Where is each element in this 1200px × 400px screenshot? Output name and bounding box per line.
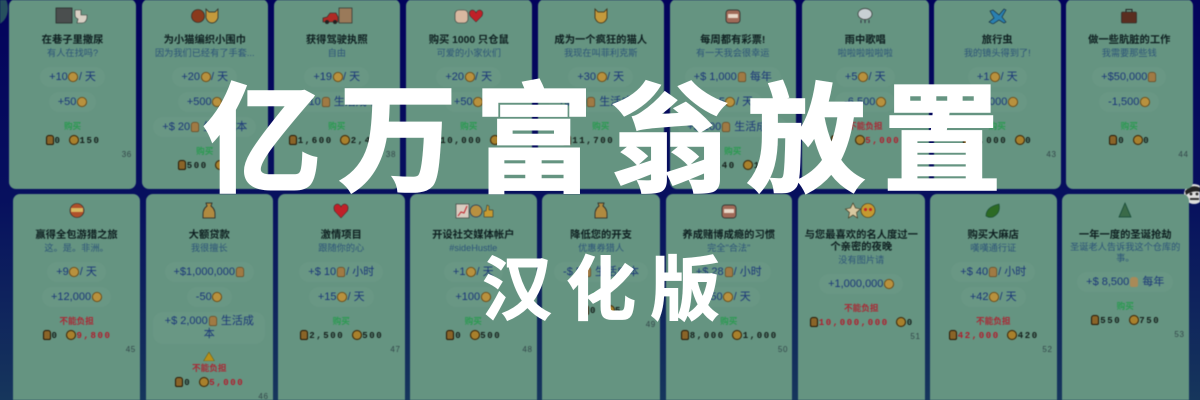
- income pill: +1,000,000: [828, 278, 883, 290]
- bonus pill: [835, 92, 895, 112]
- subtitle: 我很擅长: [191, 243, 228, 253]
- title: 购买 1000 只仓鼠: [429, 35, 509, 46]
- income pill: +30 / 天: [577, 71, 624, 83]
- title: 获得驾驶执照: [306, 35, 368, 46]
- buy label: 购买: [460, 121, 477, 131]
- buy label: 购买: [64, 121, 81, 131]
- income pill: [951, 262, 1035, 282]
- title: 赢得全包游猎之旅: [35, 230, 118, 241]
- income pill: [172, 67, 237, 87]
- cost: [445, 329, 501, 341]
- income pill: [47, 262, 106, 282]
- card 45: [13, 194, 140, 400]
- buy label: 购买: [724, 146, 741, 156]
- card 50: [666, 194, 792, 400]
- card 52: [930, 194, 1056, 400]
- income pill: +$ 10 / 小时: [308, 266, 374, 278]
- title: 养成赌博成瘾的习惯: [682, 230, 775, 241]
- card number: 48: [522, 345, 532, 354]
- subtitle: 可爱的小家伙们: [437, 48, 501, 58]
- buy label: 购买: [196, 146, 213, 156]
- income pill: [299, 262, 383, 282]
- title: 做一些肮脏的工作: [1088, 35, 1170, 46]
- card number: 38: [386, 150, 396, 159]
- subtitle: 有人在找吗?: [47, 48, 98, 58]
- living cost pill: +$ 20 生活成本: [162, 121, 247, 133]
- title: 雨中歌唱: [845, 35, 886, 46]
- subtitle: 我现在叫菲利克斯: [564, 48, 638, 58]
- subtitle: 我需要那些钱: [1102, 48, 1157, 58]
- income pill: +1 / 天: [977, 71, 1018, 83]
- income pill: +$ 28 / 小时: [696, 266, 762, 278]
- card 40: [538, 0, 664, 189]
- living cost pill: [153, 312, 265, 344]
- bonus pill: -1,500: [1108, 96, 1139, 108]
- buy label: 购买: [1117, 301, 1134, 311]
- subtitle: localized edition: 汉化版: [482, 234, 734, 335]
- income pill: [685, 67, 781, 87]
- cost: 0 5,000: [840, 136, 900, 146]
- bonus pill: [961, 287, 1026, 307]
- icon: airplane: [988, 8, 1007, 24]
- income pill: +$1,000,000: [174, 266, 235, 278]
- card number: 44: [1178, 150, 1188, 159]
- bonus pill: [698, 287, 760, 307]
- card number: 36: [122, 150, 132, 159]
- income pill: [164, 262, 254, 282]
- card 36: [9, 0, 136, 189]
- card 37: [142, 0, 268, 189]
- cost: 2,500 500: [309, 331, 383, 341]
- cost: [177, 159, 233, 171]
- income pill: +9 / 天: [56, 266, 97, 278]
- bonus pill: -6,500: [844, 96, 875, 108]
- bonus pill: [703, 92, 762, 112]
- income pill: +10 / 天: [49, 71, 96, 83]
- icon: christmas tree: [1118, 202, 1132, 218]
- title: 降低您的开支: [570, 230, 632, 241]
- bonus pill: -50 / 天: [707, 291, 751, 303]
- subtitle: 我的镜头得到了!: [964, 48, 1031, 58]
- card 49: [542, 194, 660, 400]
- title: 与您最喜欢的名人度过一个亲密的夜晚: [805, 230, 918, 253]
- cannot afford label: 不能负担: [976, 316, 1010, 326]
- subtitle: 没有图片请: [838, 255, 884, 265]
- bonus pill: [187, 287, 232, 307]
- icon: car and licence: [322, 7, 353, 24]
- buy label: 购买: [592, 121, 609, 131]
- icon: heart: [333, 203, 349, 218]
- bonus pill: [49, 92, 96, 112]
- icon: slot machine: [725, 9, 741, 24]
- card 41: [670, 0, 796, 189]
- card 44: [1066, 0, 1192, 189]
- buy label: 购买: [989, 121, 1006, 131]
- cost: 0 0: [1118, 136, 1150, 146]
- living cost pill: [287, 92, 387, 112]
- subtitle: 跟随你的心: [318, 243, 364, 253]
- title: 大额贷款: [189, 230, 230, 241]
- income pill: [1092, 67, 1166, 87]
- card number: 51: [910, 332, 920, 341]
- income pill: +1 / 天: [453, 266, 494, 278]
- title: 亿万富翁放置: [203, 45, 1019, 216]
- cost: 11,700 0: [572, 136, 639, 146]
- bonus pill: [42, 287, 111, 307]
- cost: [1108, 134, 1150, 146]
- title: 每周都有彩票!: [700, 35, 765, 46]
- card number: 43: [1046, 150, 1056, 159]
- bonus pill: -3,000: [976, 96, 1007, 108]
- subtitle: 有一天我会很幸运: [696, 48, 770, 58]
- bonus pill: -50: [196, 291, 212, 303]
- icon: warning: [203, 352, 215, 362]
- buy label: 购买: [328, 121, 345, 131]
- cost: 0 5,000: [184, 378, 244, 388]
- card 48: [410, 194, 536, 400]
- income pill: +19 / 天: [313, 71, 360, 83]
- bonus pill: +50: [454, 96, 473, 108]
- buy label: 购买: [592, 291, 610, 301]
- cost: 42,000 420: [958, 331, 1039, 341]
- living cost pill: -$ 10 生活成本: [296, 96, 378, 108]
- income pill: +$ 40 / 小时: [960, 266, 1026, 278]
- income pill: [436, 67, 501, 87]
- icon: yarn and cat: [190, 8, 219, 24]
- income pill: +$ 1,000 每年: [694, 71, 772, 83]
- cost: 4,000 0: [972, 136, 1032, 146]
- cost: 8,000 1,000: [690, 331, 778, 341]
- cost: 550 750: [1100, 316, 1160, 326]
- icon: rain cloud: [857, 8, 873, 24]
- living cost pill: -$ 5 生活成本: [563, 266, 639, 278]
- income pill: [968, 67, 1027, 87]
- buy label: 购买: [333, 316, 350, 326]
- cost: 0 500: [455, 331, 501, 341]
- subtitle: 啦啦啦啦啦啦: [838, 48, 893, 58]
- bonus pill: +500: [187, 96, 212, 108]
- income pill: +$50,000: [1101, 71, 1147, 83]
- card 47: [278, 194, 404, 400]
- bonus pill: [1099, 92, 1159, 112]
- income pill: [687, 262, 771, 282]
- card 53: [1062, 194, 1188, 400]
- income pill: +20 / 天: [445, 71, 492, 83]
- card 39: [406, 0, 532, 189]
- income pill: +20 / 天: [181, 71, 228, 83]
- icon: money bag: [202, 202, 216, 219]
- subtitle: 因为我们已经有了手套...: [155, 48, 255, 58]
- icon: star and heart eyes: [844, 202, 876, 219]
- title: 成为一个疯狂的猫人: [554, 35, 647, 46]
- title: 一年一度的圣诞抢劫: [1079, 230, 1172, 241]
- title: 开设社交媒体帐户: [432, 230, 514, 241]
- income pill: [304, 67, 369, 87]
- subtitle: 这。是。非洲。: [44, 243, 109, 253]
- card number: 47: [390, 345, 400, 354]
- icon: door and toilet: [55, 7, 88, 24]
- cannot afford label: 不能负担: [59, 316, 94, 326]
- bonus pill: +100: [455, 291, 480, 303]
- bonus pill: [309, 287, 374, 307]
- card number: 50: [778, 345, 788, 354]
- cost: 0 150: [55, 136, 101, 146]
- subtitle: 嘆嘆通行证: [970, 243, 1016, 253]
- subtitle: 自由: [328, 48, 346, 58]
- card 43: [934, 0, 1060, 189]
- cost: 140 1: [715, 161, 761, 171]
- card number: 49: [646, 320, 656, 329]
- buy label: 购买: [1121, 121, 1138, 131]
- icon: safari face: [69, 202, 85, 218]
- bonus pill: +15 / 天: [318, 291, 365, 303]
- living cost pill: [153, 117, 256, 137]
- income pill: +5 / 天: [845, 71, 886, 83]
- icon: chart, face and thumb: [455, 203, 494, 219]
- cost: 1,600 2,400: [298, 136, 386, 146]
- bonus pill: +50: [58, 96, 76, 108]
- cannot afford label: 不能负担: [848, 121, 882, 131]
- card 38: [274, 0, 400, 189]
- cost: 0 5: [590, 306, 622, 316]
- card number: 45: [126, 345, 136, 354]
- card 46: [146, 194, 272, 400]
- title: 在巷子里撒尿: [42, 35, 103, 46]
- cost: 0 9,800: [52, 331, 112, 341]
- subtitle: 完全"合法": [707, 243, 750, 253]
- buy label: 购买: [465, 316, 482, 326]
- subtitle: #sideHustle: [449, 243, 497, 253]
- living cost pill: [554, 262, 648, 282]
- icon: money bag: [594, 202, 608, 219]
- cost: 10,000 0: [440, 136, 507, 146]
- bonus pill: +42 / 天: [970, 291, 1017, 303]
- card 42: [802, 0, 928, 189]
- living cost pill: +$ 50 生活成本: [558, 96, 643, 108]
- cannot afford label: 不能负担: [192, 363, 226, 373]
- income pill: [568, 67, 633, 87]
- income pill: [40, 67, 105, 87]
- icon: leaf: [985, 203, 1000, 218]
- income pill: +$ 8,500 每年: [1086, 276, 1164, 288]
- title: 购买大麻店: [968, 230, 1019, 241]
- bonus pill: [445, 92, 493, 112]
- title: 激情项目: [321, 230, 362, 241]
- avatar icon: [1183, 183, 1200, 205]
- card number: 52: [1042, 345, 1052, 354]
- income pill: [444, 262, 503, 282]
- cost: 10,000,000 0: [819, 318, 914, 328]
- living cost pill: +$ 100 生活成本: [687, 121, 778, 133]
- bonus pill: +12,000: [51, 291, 91, 303]
- bonus pill: [967, 92, 1027, 112]
- bonus pill: [446, 287, 500, 307]
- icon: hamster and heart: [454, 9, 484, 24]
- living cost pill: [549, 92, 652, 112]
- cost: 500 0: [187, 161, 233, 171]
- income pill: [1077, 272, 1173, 292]
- income pill: [836, 67, 895, 87]
- card 51: [798, 194, 924, 400]
- living cost pill: [678, 117, 787, 137]
- cannot afford label: 不能负担: [844, 303, 878, 313]
- living cost pill: +$ 2,000 生活成本: [165, 315, 254, 340]
- bonus pill: [178, 92, 232, 112]
- bonus pill: +5 / 天: [712, 96, 753, 108]
- decorative corner button: [0, 0, 8, 25]
- income pill: [819, 274, 903, 294]
- buy label: 购买: [720, 316, 737, 326]
- icon: briefcase: [1120, 8, 1138, 24]
- icon: slot machine: [721, 204, 737, 219]
- cost: [45, 134, 101, 146]
- title: 旅行虫: [982, 35, 1013, 46]
- icon: cat: [594, 8, 608, 24]
- card number: 53: [1174, 330, 1184, 339]
- subtitle: 优惠券猎人: [578, 243, 624, 253]
- subtitle: 圣诞老人告诉我这个仓库的事。: [1070, 242, 1180, 263]
- title: 为小猫编织小围巾: [164, 35, 246, 46]
